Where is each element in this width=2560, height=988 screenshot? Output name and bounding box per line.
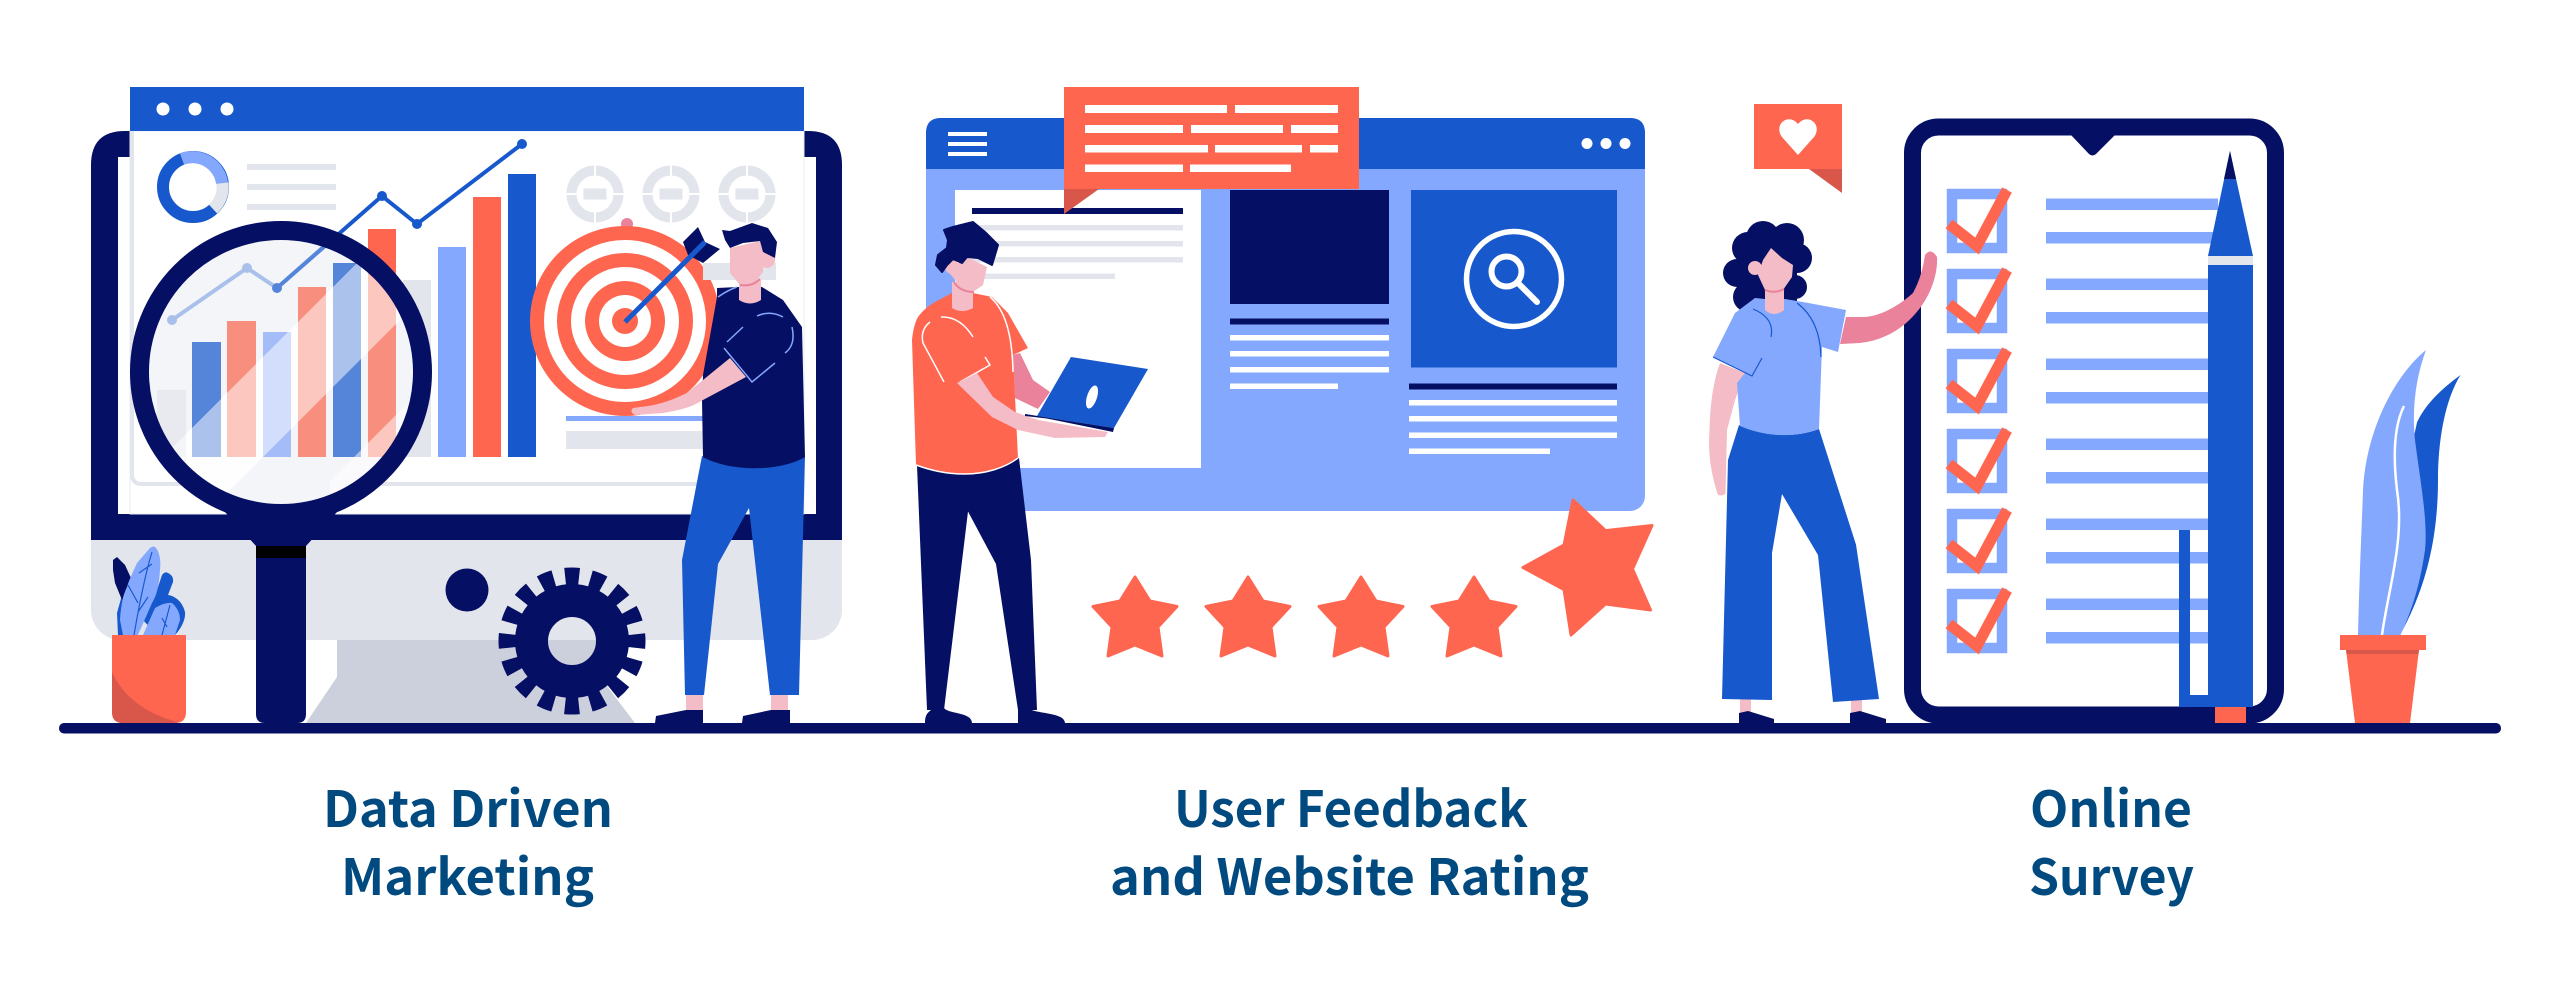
caption: user feedback and website rating: and Website Rating: [1110, 838, 1589, 910]
caption: user feedback and website rating: [1110, 770, 1589, 910]
character: woman with survey: [1709, 221, 1937, 723]
target board: [530, 218, 720, 416]
caption: user feedback and website rating: User Feedback: [1174, 770, 1528, 842]
icon: potted plant: [112, 546, 186, 723]
bar chart: [157, 174, 536, 457]
icon: gear: [507, 576, 637, 706]
trend line: [172, 139, 527, 320]
caption: data driven marketing: Marketing: [341, 838, 594, 910]
caption: online survey: [2029, 770, 2194, 910]
phone: [1912, 127, 2276, 715]
legend lines: [247, 164, 336, 210]
chart text blocks: [566, 263, 776, 449]
ring gauges: [566, 165, 776, 223]
caption: data driven marketing: [323, 770, 613, 910]
panel: user feedback and website rating illustration: [912, 87, 1652, 723]
website window: [926, 118, 1645, 511]
caption: data driven marketing: Data Driven: [323, 770, 613, 842]
monitor chin: [91, 480, 842, 640]
four rating stars: [1093, 577, 1516, 656]
donut chart: [163, 157, 223, 217]
magnifier: [140, 230, 422, 723]
survey checklist: [1949, 190, 2218, 648]
caption: online survey: Survey: [2029, 838, 2194, 910]
speech bubble: [1064, 87, 1359, 214]
monitor button: [446, 568, 488, 612]
search content column: [1409, 190, 1617, 454]
pencil: [2179, 151, 2253, 723]
browser window: [130, 87, 804, 514]
monitor stand: [306, 640, 635, 723]
character: man with target: [631, 223, 805, 723]
article card: [955, 190, 1201, 468]
panel: data driven marketing illustration: [91, 87, 842, 723]
monitor screen: [118, 157, 816, 514]
panel: online survey illustration: [1709, 104, 2460, 723]
monitor frame: [91, 131, 842, 540]
caption: online survey: Online: [2030, 770, 2192, 842]
character: man with laptop: [912, 222, 1148, 723]
ground line: [59, 723, 2501, 734]
magnifier lens contents: [149, 240, 413, 504]
middle content column: [1230, 190, 1389, 389]
icon: tall potted plant: [2340, 350, 2460, 723]
big rating star: [1523, 500, 1652, 635]
arrow in target: [625, 227, 720, 322]
icon: heart speech bubble: [1754, 104, 1842, 193]
